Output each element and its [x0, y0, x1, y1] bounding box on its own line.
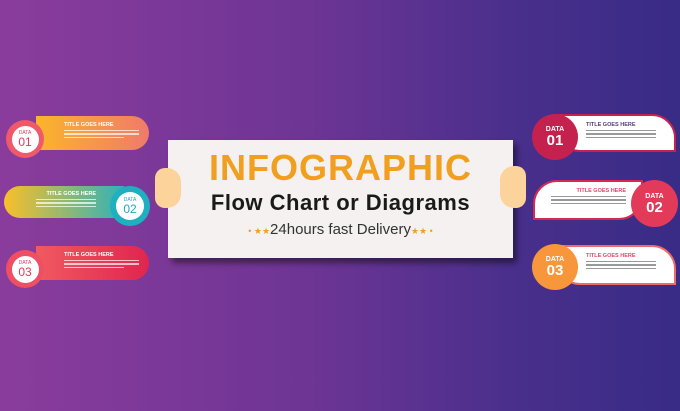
circle badge: DATA [645, 192, 664, 200]
circle badge: 02 [123, 202, 137, 216]
icon: left hand [155, 168, 181, 208]
icon: right hand [500, 166, 526, 208]
text: TITLE GOES HERE [46, 191, 96, 197]
circle badge [110, 186, 150, 226]
circle badge: 02 [646, 198, 663, 216]
text: TITLE GOES HERE [586, 122, 636, 128]
circle badge: DATA [546, 256, 564, 263]
subheading: Flow Chart or Diagrams [211, 190, 470, 215]
bar [36, 246, 149, 280]
circle badge: 03 [547, 262, 563, 279]
circle badge [6, 250, 44, 288]
circle badge [631, 180, 678, 227]
central board [168, 140, 513, 258]
circle badge: 01 [18, 134, 32, 148]
right item 3 [532, 244, 676, 290]
circle badge: DATA [124, 196, 136, 202]
card [533, 180, 643, 220]
circle badge: DATA [19, 260, 31, 266]
circle badge: DATA [19, 130, 31, 136]
card [556, 245, 676, 285]
circle badge [6, 120, 44, 158]
text: TITLE GOES HERE [586, 253, 636, 259]
circle badge [532, 114, 578, 160]
right item 2 [533, 180, 678, 227]
left item 1 [6, 116, 149, 158]
circle badge: 03 [18, 264, 32, 278]
bar [36, 116, 149, 150]
text: TITLE GOES HERE [576, 188, 626, 194]
card [556, 114, 676, 152]
right item 1 [532, 114, 676, 160]
circle badge [532, 244, 578, 290]
left item 3 [6, 246, 149, 288]
circle badge: 01 [547, 132, 563, 149]
bar [4, 186, 124, 218]
text: TITLE GOES HERE [64, 122, 114, 128]
left item 2 [4, 186, 150, 226]
text: TITLE GOES HERE [64, 252, 114, 258]
tagline: • ★★24hours fast Delivery★★ • [248, 221, 433, 238]
circle badge: DATA [546, 126, 564, 133]
heading: INFOGRAPHIC [209, 147, 472, 188]
